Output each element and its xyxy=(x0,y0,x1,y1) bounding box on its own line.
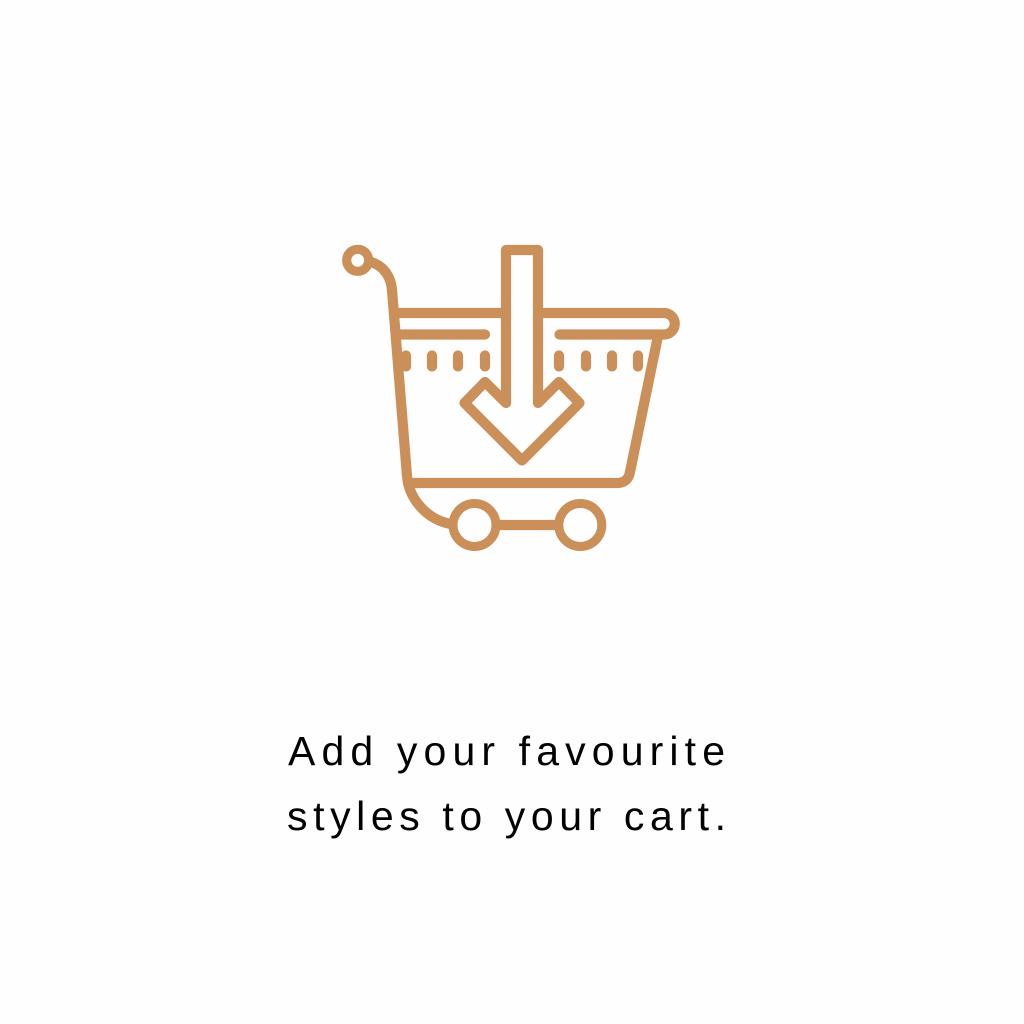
cart rim xyxy=(398,313,675,334)
caption text xyxy=(287,728,726,839)
cart handle knob xyxy=(347,249,369,271)
axle xyxy=(497,520,557,530)
cart left side and handle xyxy=(371,262,451,524)
right wheel xyxy=(559,504,602,546)
basket ventilation dashes xyxy=(406,356,638,366)
caption line 2: styles to your cart. xyxy=(287,793,726,839)
left wheel xyxy=(453,504,496,546)
cart right side and bottom xyxy=(408,336,658,483)
caption line 1: Add your favourite xyxy=(288,728,725,774)
icon: shopping cart with down arrow xyxy=(347,249,675,546)
down arrow xyxy=(464,250,580,460)
